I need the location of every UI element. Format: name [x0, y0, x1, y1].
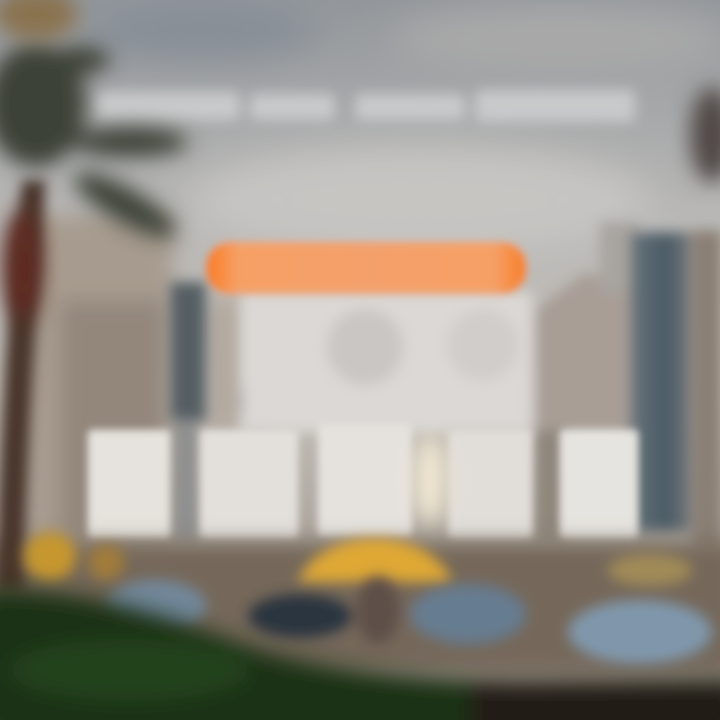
palm tree: left	[0, 0, 188, 590]
palm tree: right	[690, 87, 720, 183]
cards row	[88, 424, 638, 538]
card 4	[448, 430, 532, 538]
content panel	[240, 292, 532, 432]
sky clouds	[80, 0, 720, 255]
card 3	[318, 424, 412, 536]
buildings: right	[535, 222, 720, 550]
buildings: left	[28, 215, 246, 545]
icon: circle 1	[327, 309, 403, 385]
card 1	[88, 430, 170, 538]
heading	[95, 90, 635, 122]
street band	[0, 542, 720, 672]
card 5	[560, 430, 638, 538]
orange banner	[206, 242, 526, 294]
dark tower: left	[170, 282, 279, 540]
yellow flowers	[24, 532, 692, 586]
yellow canopy	[298, 538, 452, 582]
card glow	[412, 435, 448, 525]
hedge	[0, 590, 720, 720]
icon: circle 2	[447, 309, 519, 381]
cars	[106, 576, 712, 664]
card 2	[200, 430, 298, 538]
